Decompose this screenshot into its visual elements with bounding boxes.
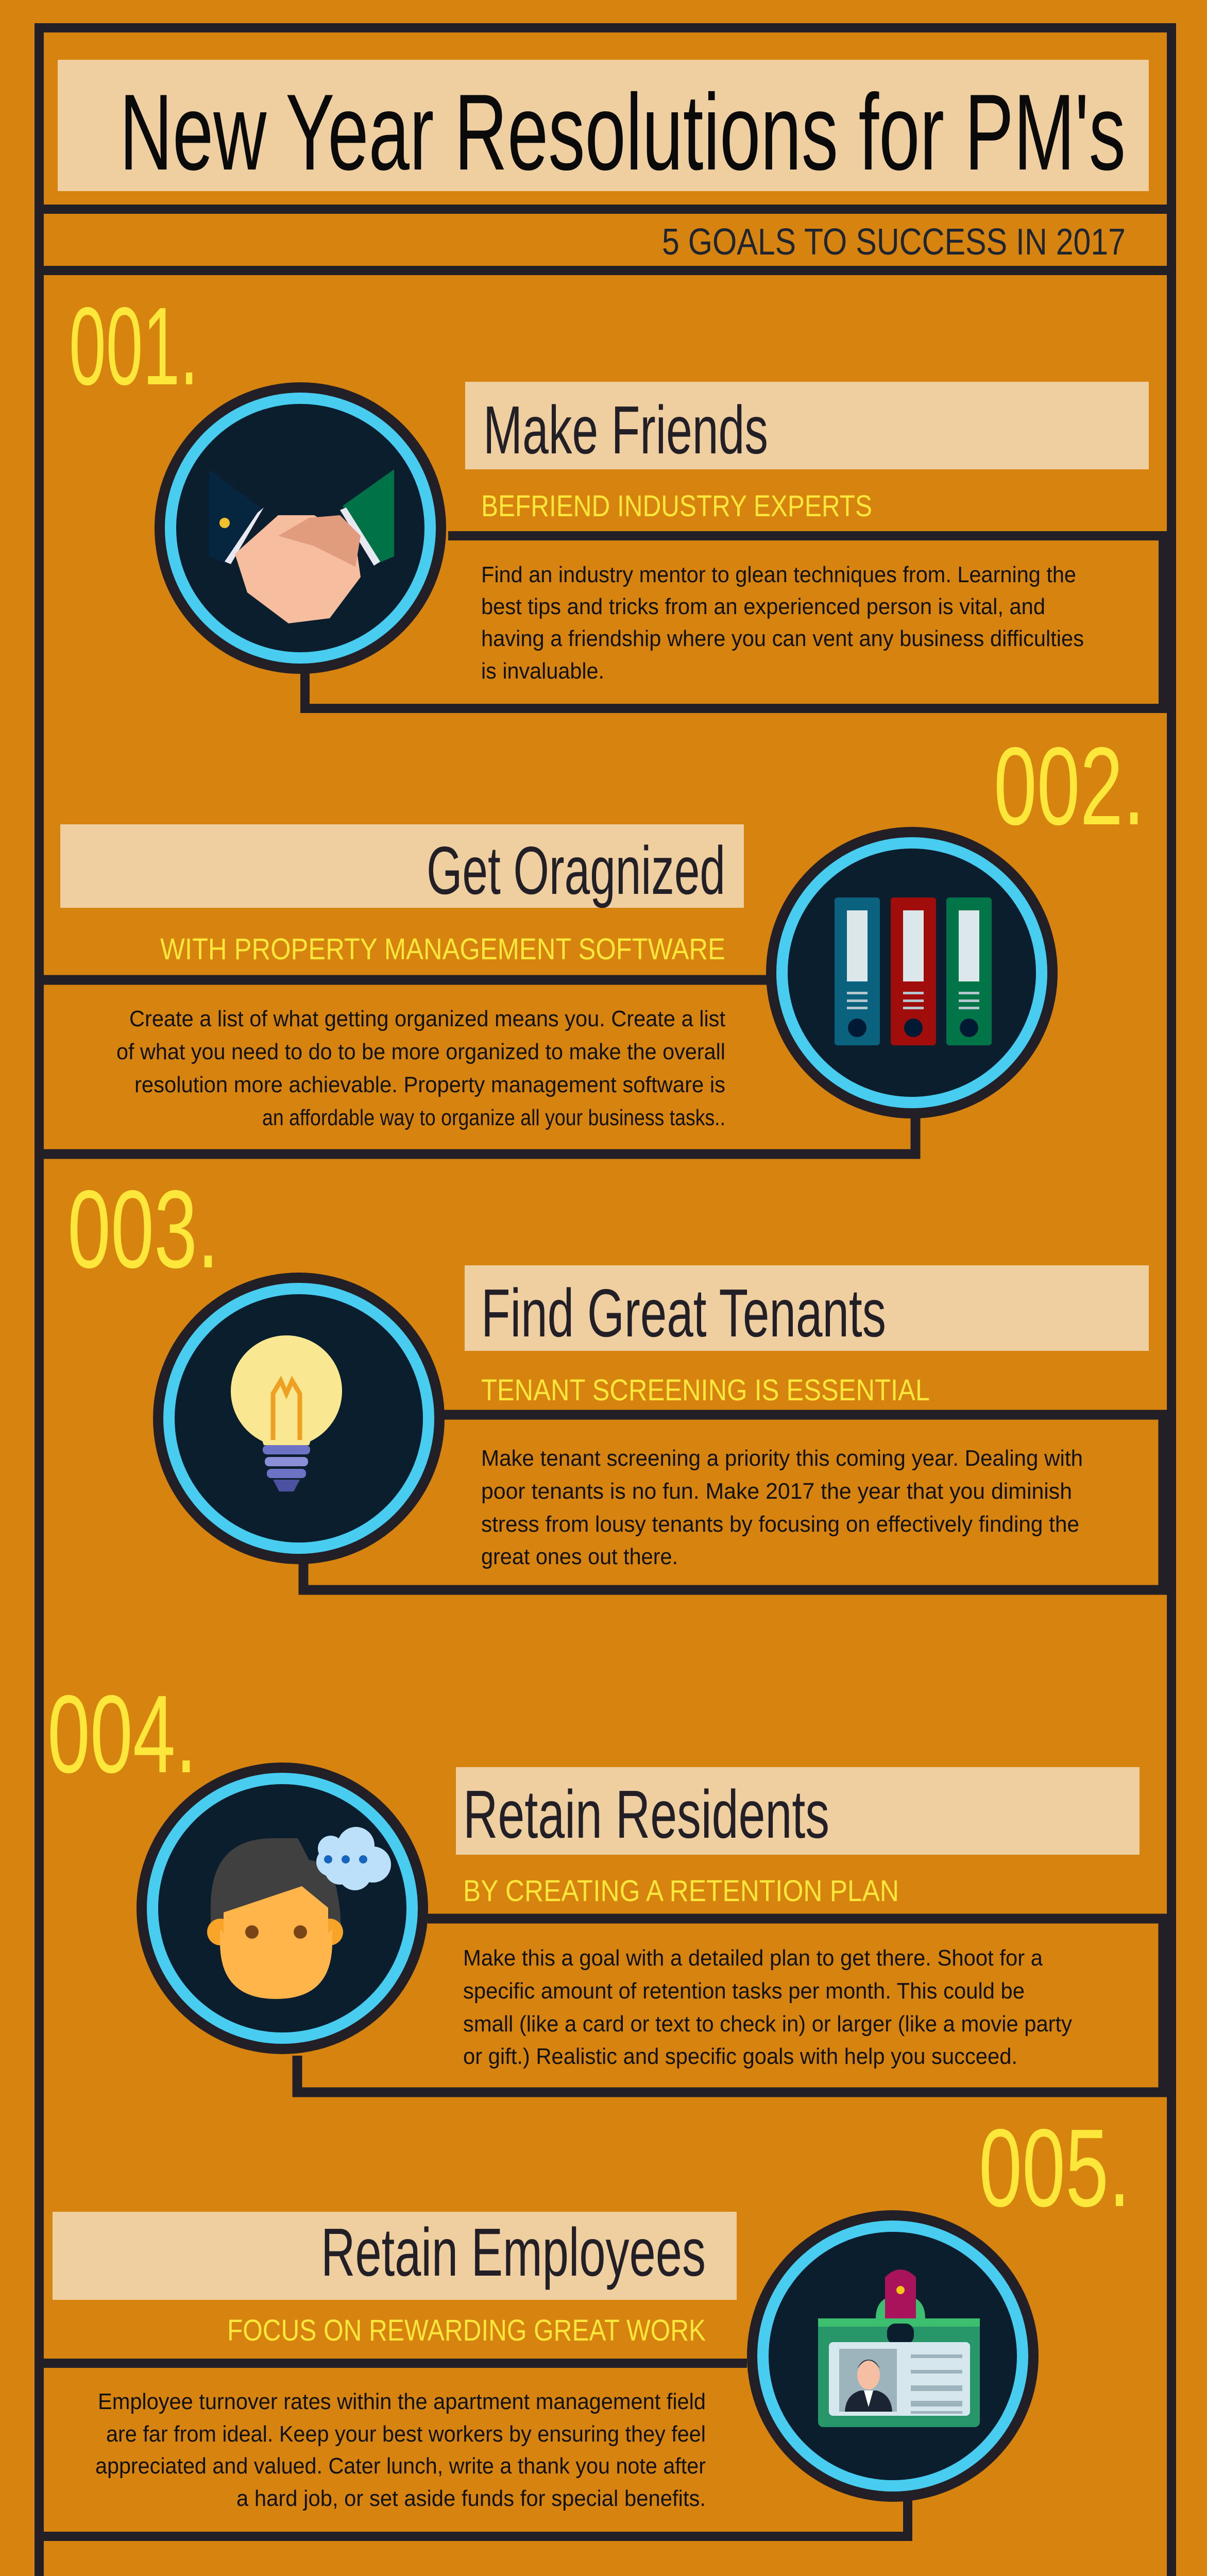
icon circle: person thinking [137, 1762, 428, 2054]
paragraph 2: an affordable way to organize all your business tasks.. [262, 1105, 725, 1130]
paragraph 1 [481, 562, 1084, 684]
connector lines 5 [44, 2363, 908, 2536]
paragraph 5: appreciated and valued. Cater lunch, write a thank you note after [95, 2453, 706, 2479]
connector lines 2 [44, 980, 915, 1154]
paragraph 1: having a friendship where you can vent any business difficulties [481, 626, 1084, 651]
icon circle: handshake [155, 382, 446, 674]
paragraph 4 [463, 1945, 1072, 2069]
paragraph 3 [481, 1446, 1083, 1569]
section 2 [44, 724, 1145, 1154]
connector lines 4 [297, 1919, 1163, 2092]
paragraph 5: Employee turnover rates within the apartment management field [98, 2389, 706, 2414]
paragraph 4: or gift.) Realistic and specific goals with help you succeed. [463, 2044, 1017, 2069]
number 004: 004. [47, 1672, 197, 1796]
heading box: Make Friends: Make Friends [483, 392, 768, 468]
paragraph 3: great ones out there. [481, 1544, 678, 1569]
section 5 [44, 2106, 1130, 2536]
paragraph 1: best tips and tricks from an experienced person is vital, and [481, 594, 1045, 619]
paragraph 4: Make this a goal with a detailed plan to get there. Shoot for a [463, 1945, 1043, 1971]
number 002: 002. [994, 724, 1145, 848]
paragraph 2 [116, 1006, 725, 1130]
paragraph 2: Create a list of what getting organized means you. Create a list [129, 1006, 725, 1031]
icon circle: lightbulb [153, 1273, 445, 1564]
section 1 [69, 284, 1163, 708]
heading box: Make Friends [465, 382, 1149, 469]
heading box: Find Great Tenants: Find Great Tenants [481, 1275, 886, 1351]
icon circle: binders [766, 827, 1058, 1118]
heading box: Get Oragnized: Get Oragnized [427, 833, 725, 908]
heading box: Retain Employees: Retain Employees [321, 2214, 706, 2290]
number 001: 001. [69, 284, 198, 408]
paragraph 3: Make tenant screening a priority this coming year. Dealing with [481, 1446, 1083, 1471]
paragraph 2: of what you need to do to be more organized to make the overall [116, 1039, 725, 1064]
paragraph 3: poor tenants is no fun. Make 2017 the year that you diminish [481, 1479, 1072, 1504]
connector lines 1 [305, 536, 1163, 708]
heading box: Retain Residents: Retain Residents [463, 1776, 829, 1852]
connector lines 3 [303, 1415, 1163, 1590]
paragraph 5: are far from ideal. Keep your best workers by ensuring they feel [106, 2421, 706, 2447]
subtitle: 5 GOALS TO SUCCESS IN 2017 [662, 222, 1126, 263]
subheading 4: BY CREATING A RETENTION PLAN [463, 1874, 899, 1908]
paragraph 1: is invaluable. [481, 658, 604, 684]
paragraph 5 [95, 2389, 706, 2511]
subheading 5: FOCUS ON REWARDING GREAT WORK [227, 2314, 706, 2347]
icon circle: ID badge [747, 2210, 1039, 2502]
section 3 [67, 1167, 1163, 1590]
section 4 [47, 1672, 1163, 2092]
paragraph 4: specific amount of retention tasks per month. This could be [463, 1978, 1025, 2004]
paragraph 5: a hard job, or set aside funds for special benefits. [236, 2486, 706, 2511]
subheading 2: WITH PROPERTY MANAGEMENT SOFTWARE [160, 933, 725, 966]
heading box: Get Oragnized [60, 824, 744, 908]
subheading 3: TENANT SCREENING IS ESSENTIAL [481, 1374, 930, 1407]
subheading 1: BEFRIEND INDUSTRY EXPERTS [481, 489, 872, 523]
paragraph 1: Find an industry mentor to glean techniques from. Learning the [481, 562, 1076, 587]
paragraph 2: resolution more achievable. Property management software is [134, 1072, 725, 1097]
number 005: 005. [979, 2106, 1130, 2230]
heading box: Retain Residents [456, 1767, 1140, 1855]
heading box: Retain Employees [53, 2212, 737, 2300]
paragraph 4: small (like a card or text to check in) or larger (like a movie party [463, 2011, 1072, 2037]
paragraph 3: stress from lousy tenants by focusing on effectively finding the [481, 1512, 1079, 1537]
title box [58, 60, 1149, 193]
number 003: 003. [67, 1167, 219, 1291]
